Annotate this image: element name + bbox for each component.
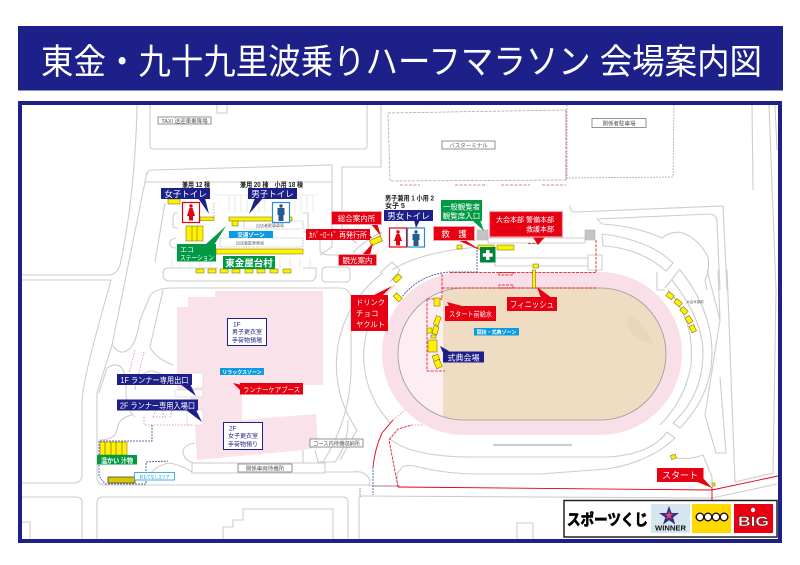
label: course waiting place: コース内待機収納所: [313, 440, 360, 448]
callout: women's toilet: [161, 188, 210, 214]
callout: finish: フィニッシュ: [510, 300, 554, 310]
logo: toto: [692, 504, 731, 533]
callout: 1F runner exit: 1F ランナー専用出口: [120, 375, 188, 385]
label: staff parking: [592, 118, 646, 128]
callout: drink, chocolate, yakult: ヤクルト: [356, 320, 385, 329]
zone label: transport zone: [229, 231, 273, 239]
label: hot soup: [97, 455, 137, 465]
box: 2F women's changing: 2F: [229, 426, 237, 432]
icon: mixed toilet women: [390, 228, 406, 247]
label: course waiting place: [310, 439, 363, 448]
building: gymnasium pink area: [175, 291, 323, 460]
label: TAXI: [158, 117, 211, 125]
callout: finish: [507, 287, 557, 311]
icon: men's toilet: [272, 202, 290, 222]
callout: first aid: 救 護: [441, 229, 467, 239]
yellow stalls and toilets: 大会本部前: [686, 299, 704, 304]
label: omotenashi area: [134, 472, 174, 480]
icon: mixed toilet men: [408, 228, 424, 247]
callout: 1F runner exit: [117, 374, 196, 396]
bus terminal outline: [388, 105, 674, 185]
icon: first aid cross: [480, 247, 496, 262]
callout: tournament headquarters: 大会本部 警備本部: [496, 215, 554, 224]
label: staff vehicle waiting: 関係車両待機所: [246, 464, 285, 472]
callout: ceremony venue: 式典会場: [448, 352, 480, 362]
rings around the stadium: [364, 285, 394, 423]
toilet counts: mixed: [385, 194, 434, 210]
callout: 2F runner entrance: [117, 400, 202, 422]
map frame: [20, 103, 780, 541]
box: 1F men's changing: 男子更衣室: [232, 328, 262, 336]
parking area top-left: 出店者駐車車両: [256, 222, 284, 228]
callout: runner care booth: ランナーケアブース: [243, 385, 300, 394]
icon: women's toilet: [182, 202, 200, 222]
zone label: athletics and ceremony: [474, 328, 519, 336]
callout: eco station: ステーション: [180, 254, 214, 262]
road network: [22, 105, 777, 539]
callout: mixed toilet: [384, 210, 433, 228]
parking area top-left: 出店者駐車車両: [236, 240, 264, 246]
label: bus terminal: [442, 141, 495, 150]
callout: tournament headquarters: 救護本部: [526, 224, 554, 234]
label: TAXI: TAXI 送迎車乗降場: [161, 117, 208, 125]
callout: runner care booth: [233, 383, 303, 394]
stadium: track and field: [382, 272, 682, 435]
callout: drink, chocolate, yakult: ドリンク: [356, 298, 385, 307]
box: 2F women's changing: 女子更衣室: [228, 432, 258, 440]
logo: BIG: [734, 504, 773, 533]
callout: 2F runner entrance: 2F ランナー専用入場口: [120, 400, 195, 410]
zone label: transport zone: 交通ゾーン: [237, 231, 265, 239]
box: 1F men's changing: 手荷物預場: [232, 336, 262, 344]
callout: spectator entrance: 観覧席入口: [443, 210, 480, 220]
callout: tournament headquarters: [490, 212, 562, 245]
yellow stalls and toilets: [100, 199, 715, 486]
box: 2F women's changing: 手荷物預り: [228, 440, 258, 448]
logo: BIG: BIG: [738, 513, 769, 529]
box: 1F men's changing: [228, 318, 266, 346]
toilet counts: mixed: 女子 5: [385, 201, 405, 210]
callout: eco station: [177, 226, 226, 262]
callout: first aid: [434, 226, 480, 250]
logo: winner: [651, 504, 690, 533]
callout: ceremony venue: [440, 346, 484, 362]
logo: sports kuji: スポーツくじ: [567, 511, 648, 529]
label: staff vehicle waiting: [238, 464, 292, 472]
title banner: [18, 26, 783, 90]
label: bus terminal: バスターミナル: [449, 142, 488, 150]
callout: eco station: エコ: [180, 246, 194, 254]
course lines: [99, 185, 778, 500]
grandstand: [477, 230, 602, 270]
title banner: 東金・九十九里波乗りハーフマラソン 会場案内図: [41, 43, 762, 82]
callout: pre-start water: スタート前給水: [449, 310, 492, 318]
toilet counts: mixed: 男子兼用 1 小用 2: [385, 194, 434, 202]
callout: men's toilet: 男子トイレ: [251, 189, 294, 199]
label: staff parking: 関係者駐車場: [602, 120, 636, 128]
sponsor logos: [564, 500, 777, 537]
zone label: relax zone: [220, 368, 264, 376]
logo: winner: WINNER: [655, 526, 686, 532]
callout: men's toilet: [248, 188, 297, 214]
callout: card reissue: ｶﾊﾞｰﾛｰﾄﾞ 再発行所: [309, 230, 367, 240]
callout: mixed toilet: 男女トイレ: [387, 211, 430, 221]
zone label: athletics and ceremony: 競技・式典ゾーン: [477, 329, 516, 336]
callout: spectator entrance: [441, 200, 484, 231]
callout: start: [657, 468, 712, 488]
parking area top-left: [172, 195, 318, 268]
label: food stall village: 東金屋台村: [225, 258, 273, 270]
zone label: relax zone: リラックスゾーン: [222, 369, 262, 376]
callout: tourist information: 観光案内: [342, 255, 372, 265]
callout: drink, chocolate, yakult: [351, 286, 392, 331]
callout: start: スタート: [662, 470, 698, 480]
callout: spectator entrance: 一般観覧者: [443, 202, 481, 212]
callout: women's toilet: 女子トイレ: [164, 189, 207, 199]
callout: general information: [332, 212, 382, 236]
box: 2F women's changing: [224, 422, 262, 450]
toilet counts: women: 兼用 12 棟: [182, 180, 210, 189]
label: omotenashi area: おもてなしエリア: [140, 474, 170, 480]
callout: pre-start water: [445, 302, 496, 321]
callout: tourist information: [338, 243, 376, 266]
label: hot soup: 温かい 汁物: [101, 456, 133, 465]
box: 1F men's changing: 1F: [233, 322, 241, 328]
callout: drink, chocolate, yakult: チョコ: [356, 309, 378, 318]
toilet counts: men: 兼用 20 棟 小用 18 棟: [240, 180, 303, 189]
callout: general information: 総合案内所: [338, 213, 376, 223]
